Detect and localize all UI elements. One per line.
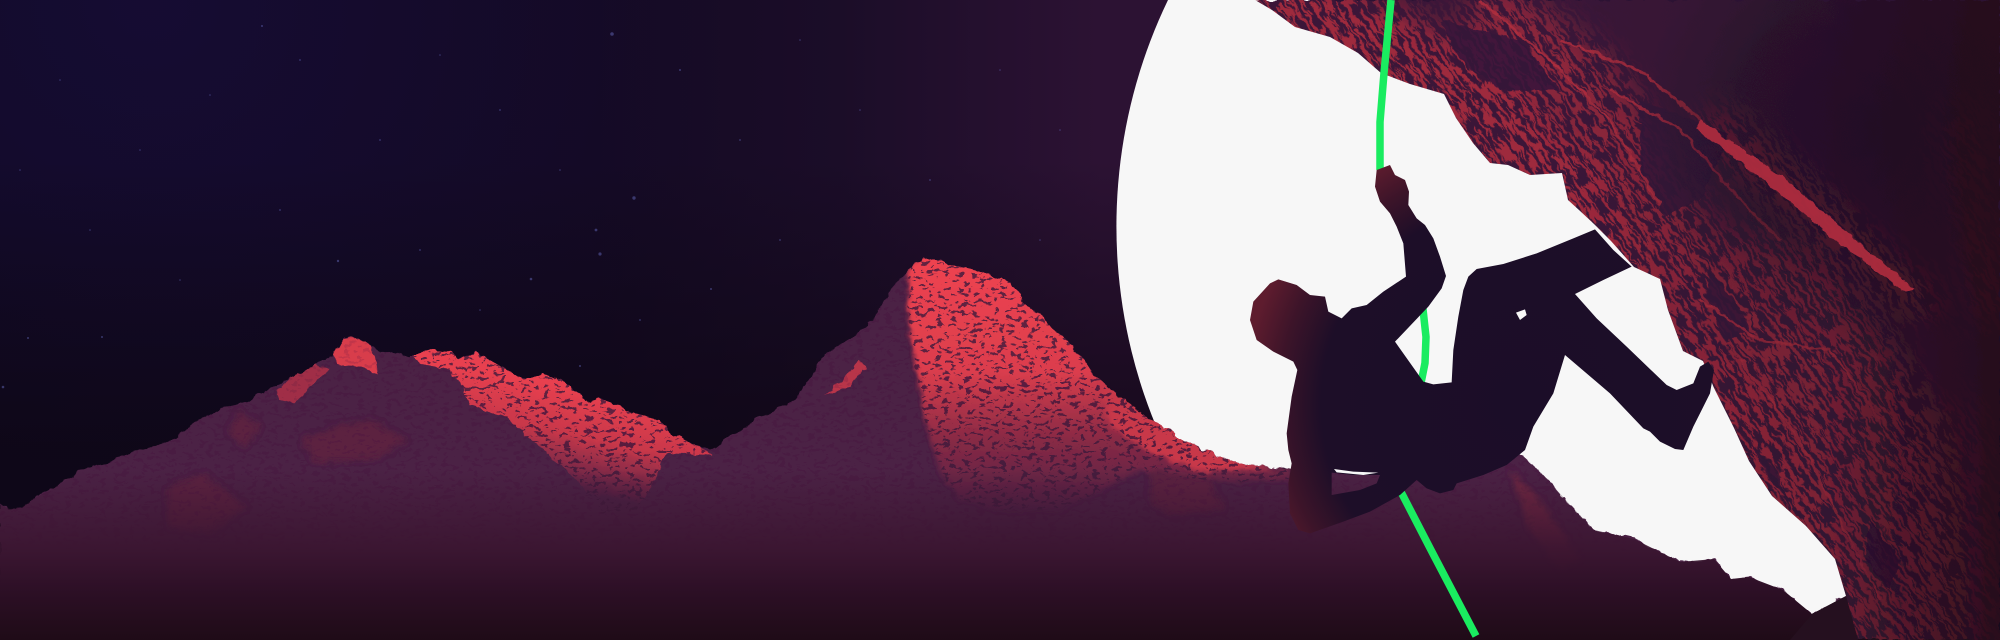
moon (1116, 0, 1880, 640)
base strip under the rock and ground (0, 630, 2000, 640)
mountains (0, 258, 1846, 614)
sunlit faces, clipped to the ridge line (277, 250, 1290, 513)
main peak lit face (908, 250, 1290, 510)
moonlight gap under arm (1334, 469, 1378, 475)
mountain silhouette (0, 257, 1870, 640)
dim red patches (168, 410, 1580, 570)
foreground fade (0, 470, 2000, 640)
thin red fissure lines (1480, 0, 1880, 600)
ridge highlights (1100, 375, 1275, 472)
left mountain lit faces (277, 339, 866, 513)
dark rock at base right (1790, 596, 1858, 640)
engraved texture on lit faces (410, 258, 1289, 506)
cliff overhang (1200, 0, 2000, 640)
bright diagonal streak (1696, 120, 1915, 292)
stars (2, 25, 1061, 388)
subtle texture on shaded faces (282, 260, 1588, 522)
rock base (1200, 0, 2000, 640)
right side shading (1620, 0, 2000, 640)
climber silhouette (1250, 165, 1714, 533)
green rope (1380, 0, 1476, 636)
upper right shadow (1656, 0, 1982, 354)
dark rock planes (1440, 20, 1900, 620)
red rock veins (1200, 0, 2000, 640)
